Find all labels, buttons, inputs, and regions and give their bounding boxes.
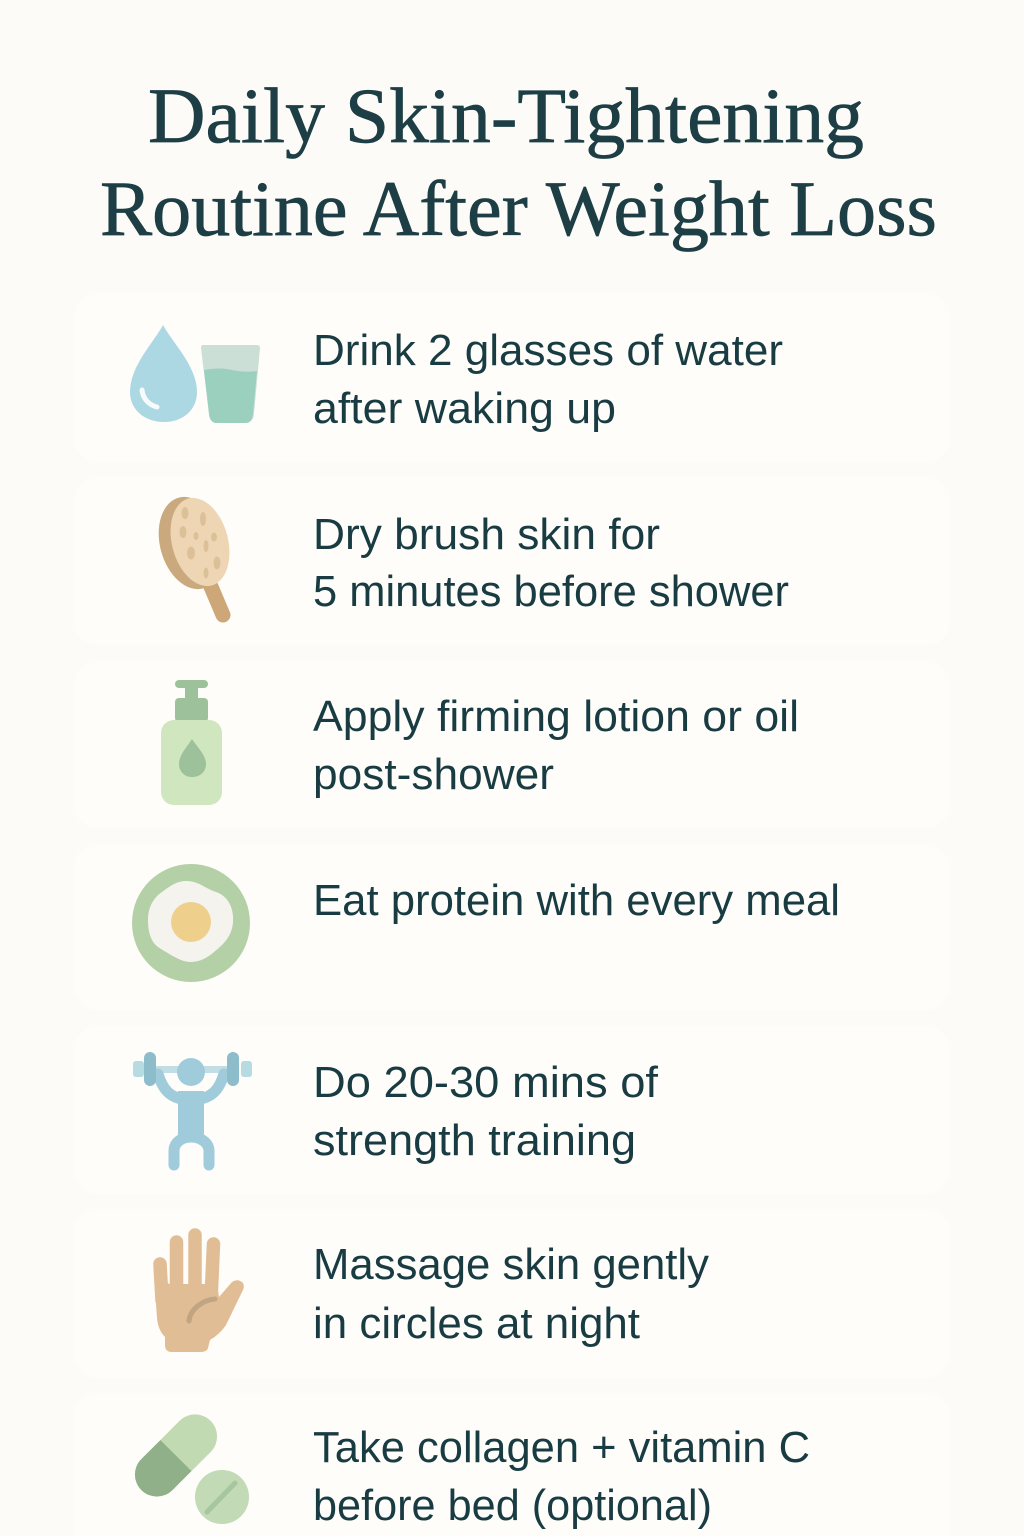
icon: egg on plate <box>132 864 250 982</box>
icon: water drop and glass <box>130 325 260 423</box>
step text: massage: Massage skin gently <box>313 1240 709 1289</box>
icon: capsule and tablet <box>126 1405 249 1524</box>
step text: lotion: Apply firming lotion or oil <box>313 692 799 741</box>
panel: collagen <box>74 1393 950 1536</box>
step text: massage <box>313 1240 709 1348</box>
step text: strength: strength training <box>313 1116 636 1165</box>
icon: hand <box>154 1235 244 1352</box>
title: Daily Skin-Tightening <box>148 72 864 159</box>
step text: massage: in circles at night <box>313 1299 640 1348</box>
step text: water <box>313 326 783 433</box>
step text: lotion: post-shower <box>313 750 554 799</box>
step text: lotion <box>313 692 799 799</box>
step text: collagen: Take collagen + vitamin C <box>313 1423 810 1472</box>
step text: brush: Dry brush skin for <box>313 510 660 559</box>
icon: dry brush <box>149 490 239 615</box>
panel: massage <box>74 1209 950 1378</box>
title: Routine After Weight Loss <box>100 165 937 252</box>
step text: protein: Eat protein with every meal <box>313 876 840 925</box>
panel: strength training <box>74 1026 950 1194</box>
step text: strength: Do 20-30 mins of <box>313 1058 659 1107</box>
panel: protein <box>74 844 950 1010</box>
panel: dry brush <box>74 477 950 645</box>
panel: lotion <box>74 661 950 828</box>
panel: drink water <box>74 293 950 462</box>
step text: strength <box>313 1058 659 1165</box>
step text: water: after waking up <box>313 384 616 433</box>
icon: weightlifter <box>133 1052 252 1165</box>
step text: brush: 5 minutes before shower <box>313 567 789 616</box>
step text: collagen: before bed (optional) <box>313 1481 712 1530</box>
title <box>100 72 937 252</box>
step text: water: Drink 2 glasses of water <box>313 326 783 375</box>
icon: lotion bottle <box>161 680 222 805</box>
step text: brush <box>313 510 789 616</box>
step text: collagen <box>313 1423 810 1530</box>
